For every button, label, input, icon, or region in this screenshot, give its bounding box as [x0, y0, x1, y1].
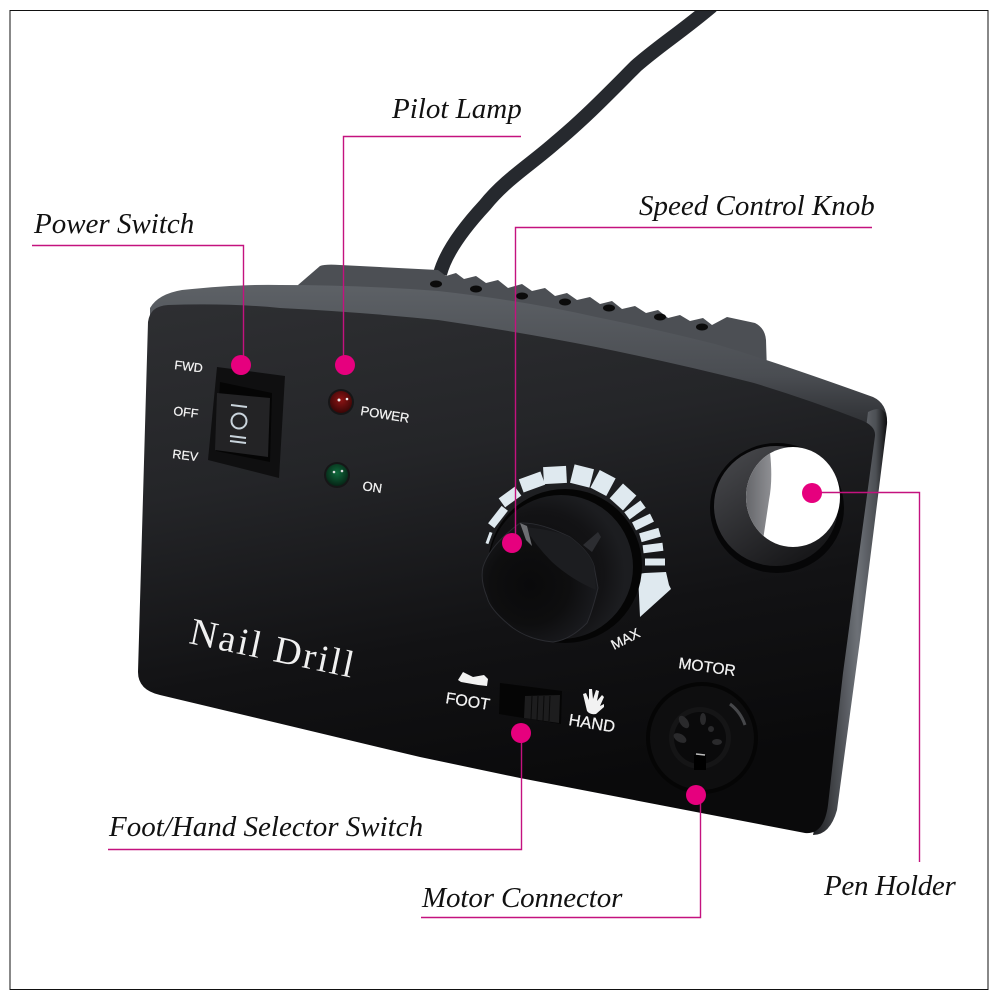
- callout: power switch: Power Switch: [33, 208, 194, 240]
- rear vented housing: [298, 265, 767, 372]
- callout: pilot lamp: [335, 93, 522, 375]
- grip facet: [525, 527, 596, 590]
- top lip of the box: [150, 285, 887, 450]
- front face: [138, 304, 875, 833]
- callout: speed control knob: Speed Control Knob: [639, 190, 875, 222]
- callout: pilot lamp: Pilot Lamp: [391, 93, 522, 125]
- switch labels: REV: [172, 447, 200, 464]
- switch labels: FWD: [174, 358, 204, 375]
- callout: pen holder: Pen Holder: [823, 870, 957, 902]
- foot icon: [458, 672, 488, 686]
- side bump: [583, 532, 601, 552]
- device: nail drill control box: [138, 265, 887, 835]
- foot label: FOOT: [444, 690, 491, 714]
- knob dome: [489, 495, 633, 639]
- hand label: HAND: [567, 711, 616, 736]
- speed scale: [486, 464, 671, 617]
- hand icon: [583, 689, 604, 714]
- device name: Nail Drill: [186, 611, 360, 687]
- callout: motor connector: Motor Connector: [421, 882, 623, 914]
- motor connector: MOTOR: [677, 655, 737, 680]
- callout: foot/hand selector switch: [108, 723, 531, 850]
- on LED: ON: [362, 478, 383, 496]
- knob grip: [482, 523, 598, 642]
- callout: pen holder: [802, 483, 957, 902]
- speed knob: [482, 489, 642, 643]
- on LED: [324, 462, 383, 496]
- callout: speed control knob: [502, 190, 875, 553]
- switch labels: OFF: [173, 404, 200, 421]
- power LED: POWER: [360, 403, 410, 426]
- switch labels: [172, 358, 204, 464]
- rocker switch: [208, 367, 285, 478]
- callout: motor connector: [421, 785, 706, 918]
- foot / hand selector: [444, 672, 616, 736]
- motor connector: [646, 655, 758, 794]
- pen holder: [710, 440, 844, 573]
- slide switch: [499, 683, 562, 724]
- power LED: [328, 389, 410, 426]
- power cord: [440, 6, 712, 274]
- callout: power switch: [32, 208, 251, 375]
- right side edge: [813, 409, 887, 835]
- pointer highlight: [520, 523, 532, 546]
- max label: MAX: [608, 624, 643, 653]
- callout: foot/hand selector switch: Foot/Hand Selector Switch: [108, 811, 423, 843]
